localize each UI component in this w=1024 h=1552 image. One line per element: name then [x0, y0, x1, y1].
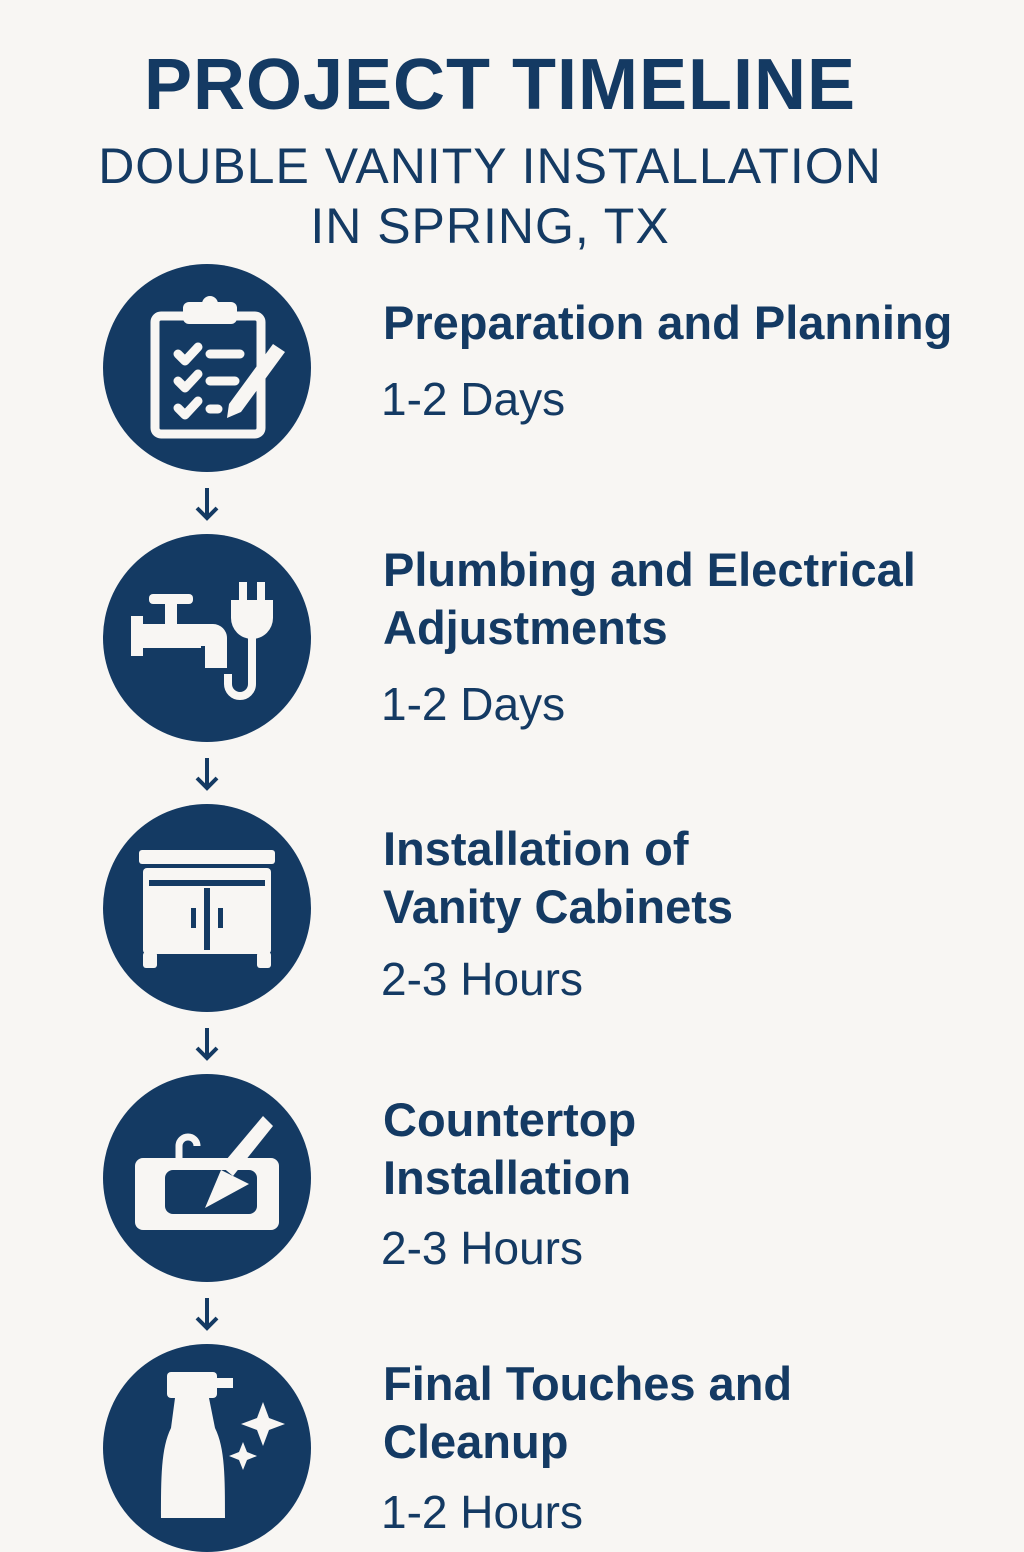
heading 5: Final Touches and	[383, 1357, 792, 1410]
heading 4	[383, 1093, 636, 1204]
heading 2: Adjustments	[383, 601, 668, 654]
heading 5: Cleanup	[383, 1415, 568, 1468]
heading 3	[383, 822, 733, 933]
subtitle: IN SPRING, TX	[310, 198, 670, 254]
duration 3: 2-3 Hours	[381, 953, 583, 1005]
heading 4: Countertop	[383, 1093, 636, 1146]
heading 5	[383, 1357, 792, 1468]
icon: spray bottle	[103, 1344, 311, 1552]
arrow 4	[196, 1298, 218, 1331]
icon: clipboard	[103, 264, 311, 472]
arrow 1	[196, 488, 218, 521]
arrow 2	[196, 758, 218, 791]
heading 3: Installation of	[383, 822, 688, 875]
heading 4: Installation	[383, 1151, 631, 1204]
heading 2: Plumbing and Electrical	[383, 543, 916, 596]
icon: faucet and plug	[103, 534, 311, 742]
subtitle	[98, 138, 882, 254]
title: PROJECT TIMELINE	[144, 45, 856, 125]
heading 1: Preparation and Planning	[383, 296, 952, 349]
subtitle: DOUBLE VANITY INSTALLATION	[98, 138, 882, 194]
duration 5: 1-2 Hours	[381, 1486, 583, 1538]
duration 2: 1-2 Days	[381, 678, 565, 730]
arrow 3	[196, 1028, 218, 1061]
heading 3: Vanity Cabinets	[383, 880, 733, 933]
icon: cabinet	[103, 804, 311, 1012]
icon: countertop	[103, 1074, 311, 1282]
heading 2	[383, 543, 916, 654]
duration 1: 1-2 Days	[381, 373, 565, 425]
duration 4: 2-3 Hours	[381, 1222, 583, 1274]
